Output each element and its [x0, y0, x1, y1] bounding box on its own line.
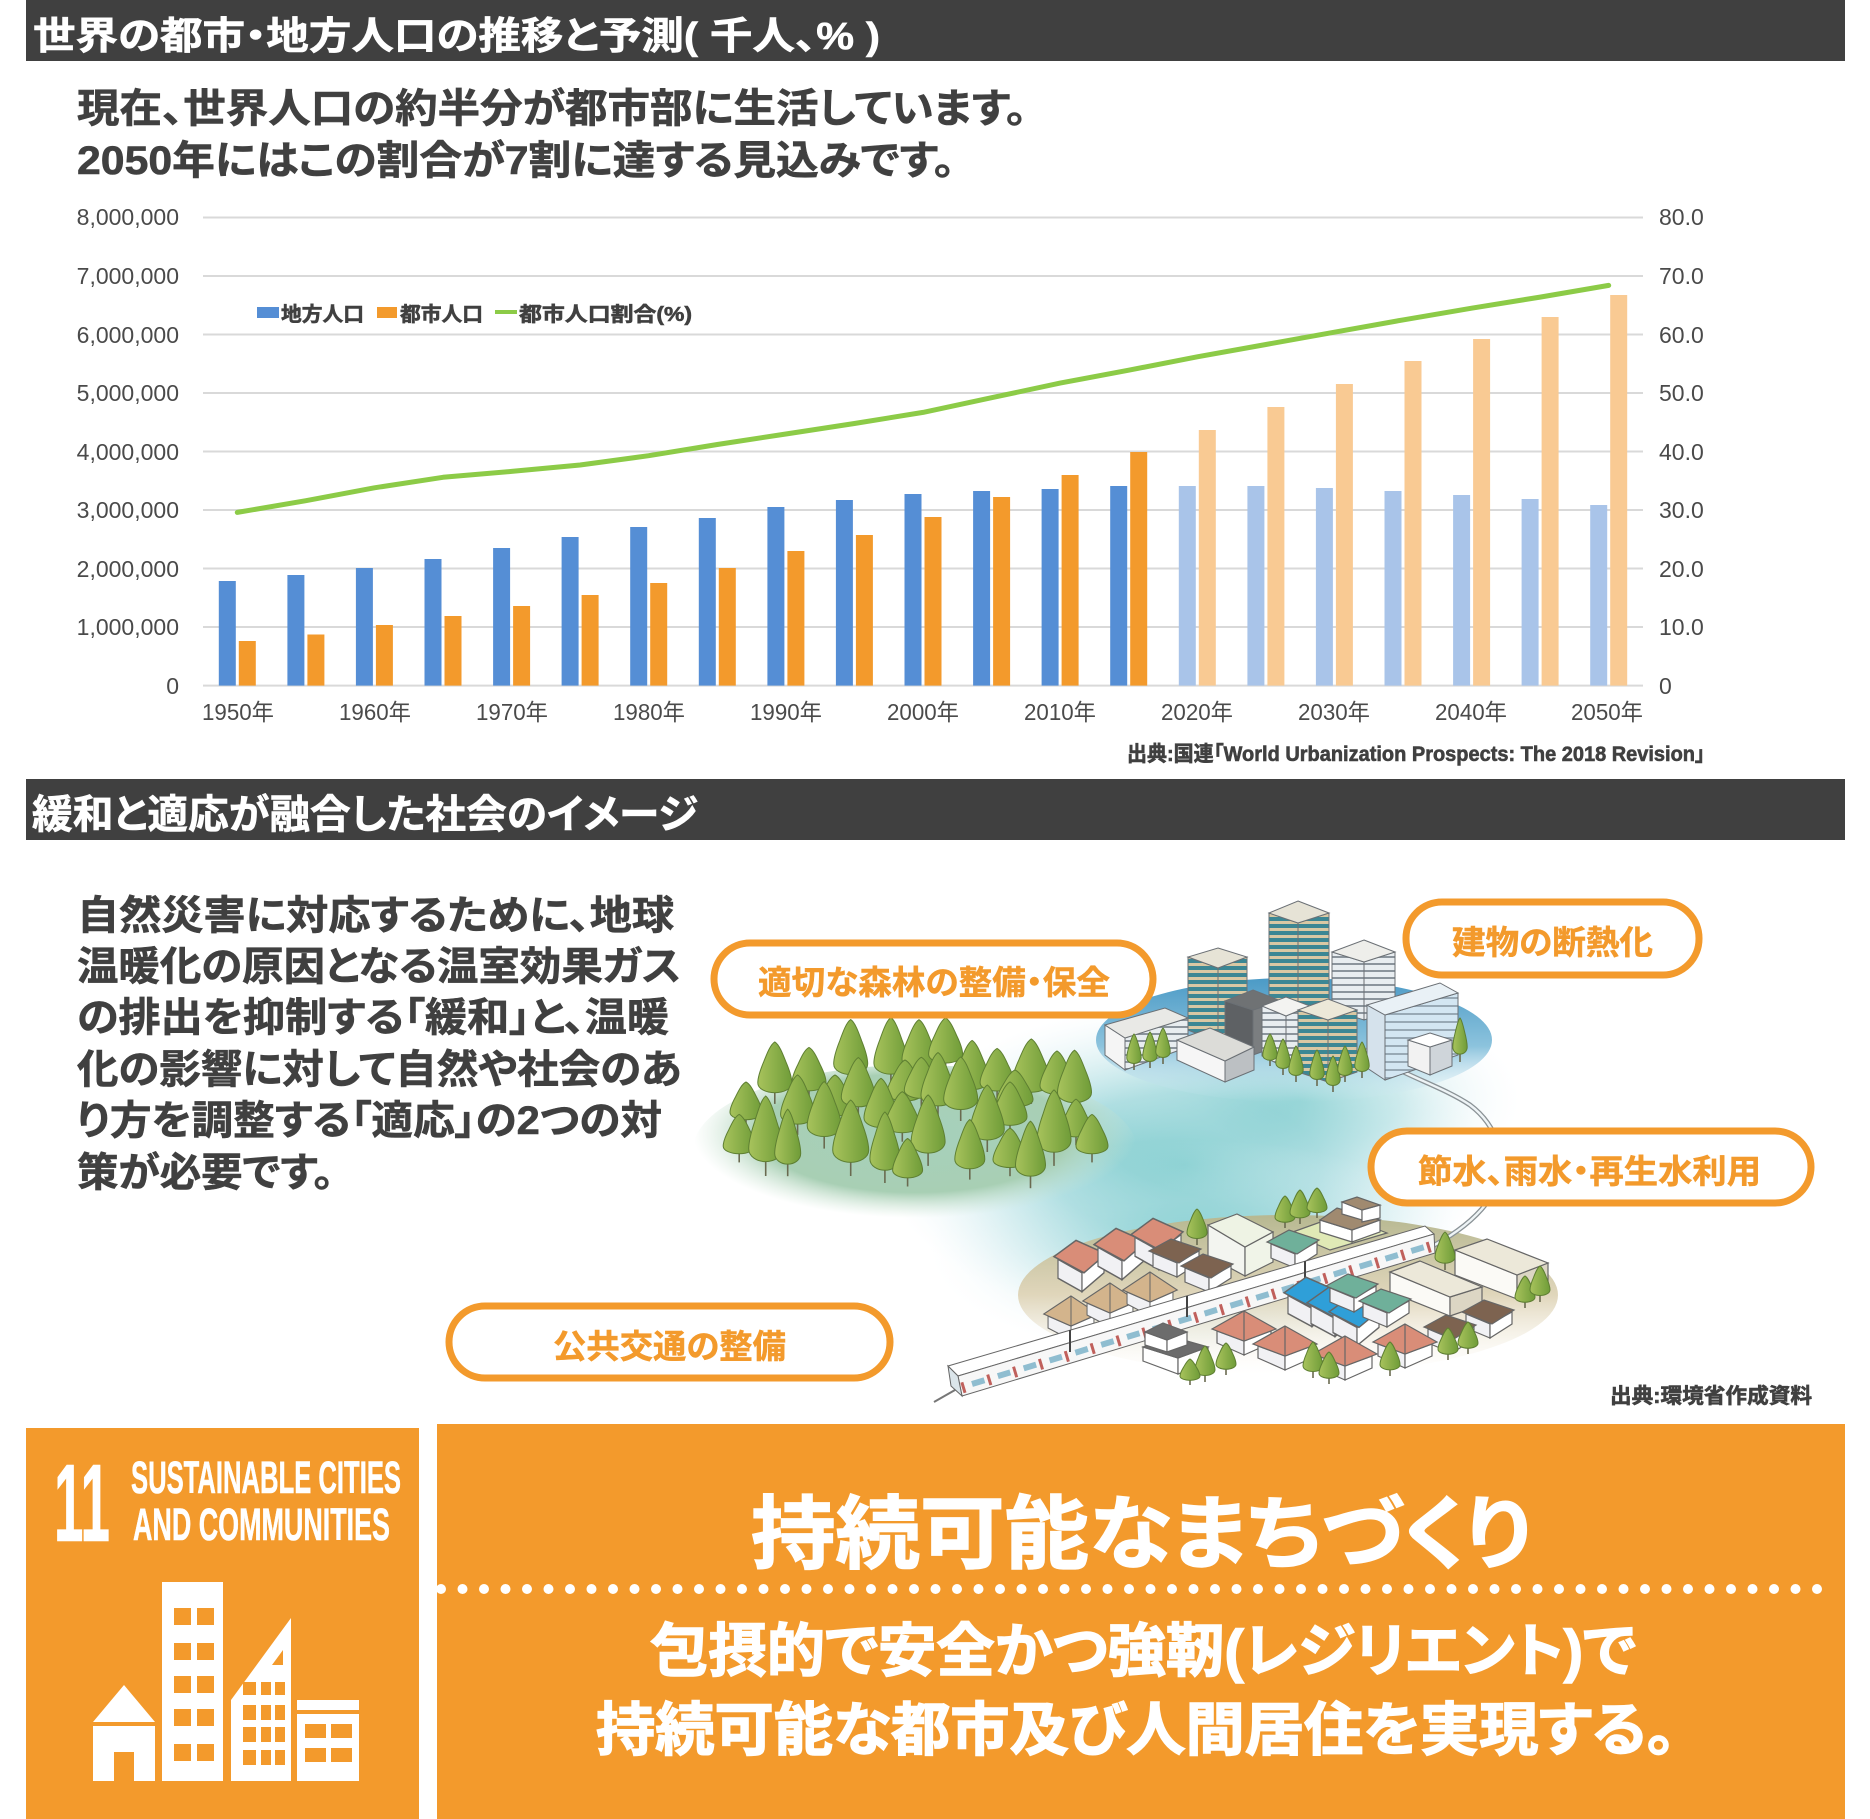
body text: mitigation and adaptation: の排出を抑制する「緩和」と、温暖 [77, 996, 669, 1040]
goal statement: 持続可能な都市及び人間居住を実現する。 [596, 1698, 1676, 1763]
right axis labels: 20.0 [1659, 556, 1704, 582]
left axis labels: 1,000,000 [77, 614, 179, 640]
year labels [202, 699, 1643, 725]
urban share line [237, 285, 1609, 512]
chart legend: 都市人口 [400, 303, 483, 326]
city ground [1096, 978, 1492, 1102]
body text: mitigation and adaptation: 化の影響に対して自然や社会のあ [77, 1048, 682, 1092]
town trees [1180, 1188, 1550, 1385]
right axis labels: 40.0 [1659, 439, 1704, 465]
year labels: 2020年 [1161, 699, 1233, 725]
rural population bars [219, 486, 1607, 686]
callout: water: 節水、雨水・再生水利用 [1418, 1153, 1761, 1190]
year labels: 1960年 [339, 699, 411, 725]
right axis labels: 10.0 [1659, 614, 1704, 640]
right axis labels: 70.0 [1659, 263, 1704, 289]
year labels: 2010年 [1024, 699, 1096, 725]
lead text: urban share [77, 87, 1027, 183]
year labels: 1990年 [750, 699, 822, 725]
panel: sustainable town-building message [437, 1424, 1845, 1819]
icon: city buildings [93, 1582, 359, 1781]
town houses behind train [1044, 1218, 1319, 1340]
lead text: urban share: 現在、世界人口の約半分が都市部に生活しています。 [77, 87, 1027, 131]
year labels: 1980年 [613, 699, 685, 725]
body text: mitigation and adaptation: り方を調整する「適応」の2つの対 [77, 1099, 662, 1143]
town houses in front of train [1143, 1274, 1514, 1380]
year labels: 2000年 [887, 699, 959, 725]
year labels: 2050年 [1571, 699, 1643, 725]
goal name: SUSTAINABLE CITIES [131, 1452, 401, 1503]
left axis labels: 3,000,000 [77, 497, 179, 523]
left axis labels: 4,000,000 [77, 439, 179, 465]
lead text: urban share: 2050年にはこの割合が7割に達する見込みです。 [77, 139, 955, 183]
header bar: world population: 世界の都市・地方人口の推移と予測( 千人、% ) [33, 16, 880, 58]
body text: mitigation and adaptation: 自然災害に対応するために、地球 [77, 894, 674, 938]
body text: mitigation and adaptation: 策が必要です。 [77, 1151, 334, 1195]
panel title: 持続可能なまちづくり [751, 1490, 1532, 1579]
body text: mitigation and adaptation: 温暖化の原因となる温室効果ガス [77, 945, 681, 989]
train [948, 1226, 1435, 1396]
callout: forest: 適切な森林の整備・保全 [758, 964, 1110, 1001]
right axis labels: 0 [1659, 673, 1672, 699]
chart legend: 都市人口割合(%) [519, 303, 692, 326]
right axis labels: 50.0 [1659, 380, 1704, 406]
body text: mitigation and adaptation [77, 894, 682, 1195]
left axis labels: 6,000,000 [77, 322, 179, 348]
right axis labels [1659, 204, 1704, 699]
left axis labels: 5,000,000 [77, 380, 179, 406]
goal statement [596, 1619, 1676, 1763]
forest ground [693, 1065, 1137, 1235]
combo chart: population bars and urban share line [77, 204, 1704, 725]
header bar: mitigation and adaptation: 緩和と適応が融合した社会のイメージ [32, 793, 698, 837]
year labels: 2030年 [1298, 699, 1370, 725]
right axis labels: 60.0 [1659, 322, 1704, 348]
source note: UN: 出典:国連「World Urbanization Prospects: The 2018 Revision」 [1127, 743, 1705, 766]
illustration: city, forest and town [693, 901, 1558, 1402]
source note: Ministry of the Environment: 出典:環境省作成資料 [1610, 1384, 1812, 1408]
callout: public transport [449, 1306, 890, 1378]
town: plot and back buildings [1208, 1197, 1548, 1316]
left axis labels [77, 204, 179, 699]
year labels: 1970年 [476, 699, 548, 725]
city buildings [1105, 901, 1458, 1082]
callout: building insulation: 建物の断熱化 [1452, 924, 1653, 961]
city trees [1127, 1018, 1467, 1092]
left axis labels: 7,000,000 [77, 263, 179, 289]
left axis labels: 2,000,000 [77, 556, 179, 582]
year labels: 1950年 [202, 699, 274, 725]
header bar: mitigation and adaptation [26, 779, 1845, 840]
chart legend [257, 303, 692, 326]
right axis labels: 80.0 [1659, 204, 1704, 230]
urban population bars [239, 295, 1627, 686]
SDG 11 panel [26, 1428, 419, 1819]
chart legend: 地方人口 [281, 303, 364, 326]
teal background glow [885, 990, 1520, 1360]
goal statement: 包摂的で安全かつ強靭(レジリエント)で [650, 1619, 1636, 1684]
left axis labels: 8,000,000 [77, 204, 179, 230]
forest trees [723, 1018, 1108, 1188]
town ground [1018, 1215, 1558, 1375]
left axis labels: 0 [166, 673, 179, 699]
dotted divider [441, 1584, 1835, 1594]
callout: forest [714, 943, 1153, 1015]
callout: public transport: 公共交通の整備 [553, 1328, 786, 1365]
callout: building insulation [1406, 902, 1699, 975]
right axis labels: 30.0 [1659, 497, 1704, 523]
header bar: world population [26, 0, 1845, 61]
SDG 11 panel: 11 [54, 1442, 110, 1565]
goal name: AND COMMUNITIES [133, 1499, 390, 1550]
goal name [131, 1452, 401, 1550]
callout: water [1371, 1131, 1811, 1203]
year labels: 2040年 [1435, 699, 1507, 725]
railway track [934, 1049, 1502, 1402]
